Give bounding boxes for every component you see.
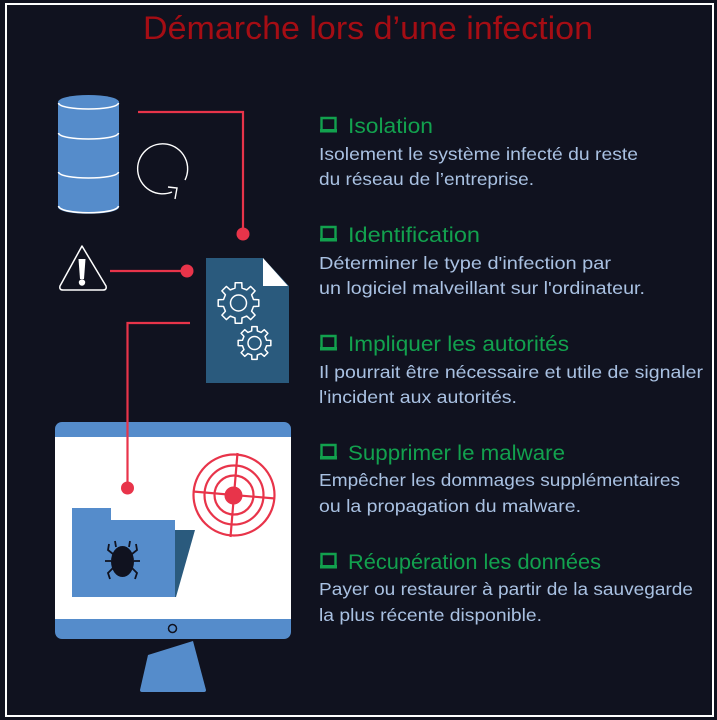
item: Identification: Identification	[348, 224, 480, 247]
connector: document to monitor	[121, 323, 190, 494]
icon: warning triangle	[60, 246, 106, 290]
item: Isolation: Isolement le système infecté du reste	[319, 144, 638, 164]
item: Impliquer les autorités: Impliquer les autorités	[348, 333, 569, 356]
item: Récupération les données: la plus récente disponible.	[319, 605, 542, 625]
item: Impliquer les autorités: Il pourrait être nécessaire et utile de signaler	[319, 362, 703, 382]
item: Supprimer le malware: ou la propagation du malware.	[319, 496, 581, 516]
item: Isolation	[319, 115, 638, 189]
icon: refresh arrow	[138, 144, 188, 199]
item: Isolation: du réseau de l’entreprise.	[319, 169, 534, 189]
item: Récupération les données: Payer ou restaurer à partir de la sauvegarde	[319, 579, 693, 599]
item: Isolation: Isolation	[348, 115, 433, 138]
icon: target	[193, 453, 275, 537]
icon: document with gears	[206, 258, 289, 383]
item: Supprimer le malware: Empêcher les dommages supplémentaires	[319, 470, 680, 490]
item: Supprimer le malware: Supprimer le malware	[348, 442, 565, 465]
item: Impliquer les autorités: l'incident aux autorités.	[319, 387, 517, 407]
item: Identification: Déterminer le type d'infection par	[319, 253, 611, 273]
connector: warning to document	[110, 264, 194, 278]
item: Supprimer le malware	[319, 442, 680, 516]
connector: database to document	[138, 112, 250, 240]
icon: database	[58, 95, 119, 214]
item: Identification	[319, 224, 645, 298]
icon: monitor	[55, 422, 291, 692]
item: Récupération les données	[319, 551, 693, 625]
title: Démarche lors d’une infection	[143, 10, 593, 46]
item: Identification: un logiciel malveillant sur l'ordinateur.	[319, 278, 645, 298]
icon: folder with bug	[72, 508, 195, 597]
item: Récupération les données: Récupération les données	[348, 551, 601, 574]
item: Impliquer les autorités	[319, 333, 703, 407]
